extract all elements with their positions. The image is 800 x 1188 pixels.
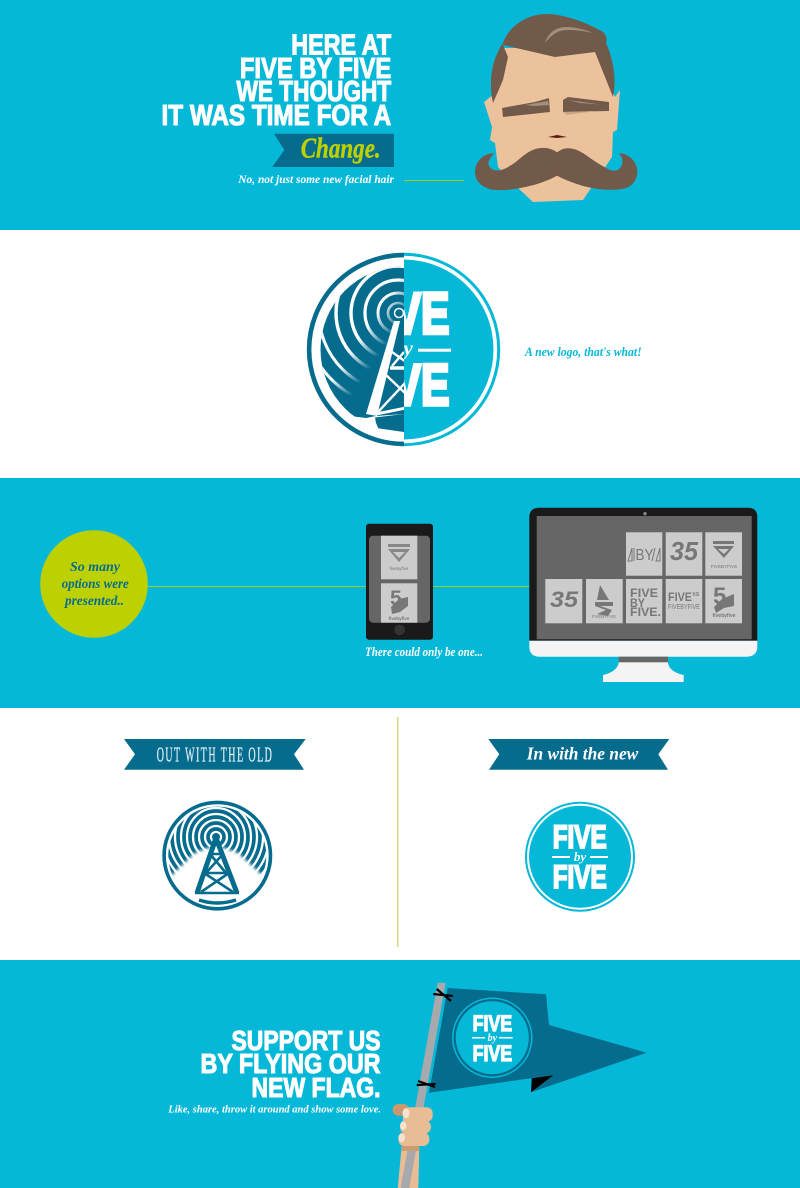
- logo option tiles: FIVEBYFIVE: [668, 604, 700, 611]
- logo option tiles: XS: [692, 592, 700, 598]
- heading: support us: SUPPORT US: [232, 1025, 380, 1056]
- new half of logo: [404, 252, 500, 446]
- new half of logo: by: [393, 336, 414, 360]
- heading: support us: [200, 1025, 381, 1103]
- title: IT WAS TIME FOR A: [162, 100, 391, 132]
- callout: so many options: options were: [62, 577, 129, 592]
- new half of logo: FIVE: [354, 353, 450, 418]
- logo option tiles: FIVE.: [630, 607, 661, 619]
- icon: phone: fivebyfive: [390, 566, 409, 571]
- old half of logo: [306, 252, 404, 446]
- section background: old and new: [0, 708, 800, 960]
- icon: flag held in hand: FIVE: [473, 1041, 512, 1066]
- divider between old and new: [397, 717, 398, 947]
- callout: so many options: presented..: [64, 594, 124, 609]
- connector line through devices: [148, 586, 530, 587]
- title: [162, 30, 392, 132]
- logo option tiles: FIVEBYFIVE: [592, 614, 616, 619]
- section background: options: [0, 478, 800, 708]
- ribbon: change: Change.: [301, 132, 381, 164]
- logo option tiles: FIVEBYFIVE: [711, 564, 737, 569]
- icon: phone: fivebyfive: [389, 616, 410, 621]
- new logo: [526, 803, 634, 911]
- title: FIVE BY FIVE: [240, 53, 391, 85]
- caption: new logo: A new logo, that's what!: [524, 344, 642, 359]
- new logo: by: [574, 849, 586, 864]
- icon: flag held in hand: by: [488, 1033, 498, 1044]
- logo option tiles: [545, 532, 742, 623]
- logo option tiles: BY: [630, 598, 645, 610]
- old logo: [162, 800, 272, 911]
- subtitle: like share: Like, share, throw it around and show some love.: [167, 1104, 381, 1116]
- heading: support us: NEW FLAG.: [252, 1072, 380, 1103]
- ribbon: out with the old: [124, 739, 306, 770]
- icon: moustached face: [476, 14, 637, 202]
- new logo: FIVE: [553, 859, 607, 895]
- logo option tiles: BY: [636, 547, 654, 564]
- ribbon: in with the new: In with the new: [526, 744, 639, 764]
- logo option tiles: fivebyfive: [712, 613, 736, 619]
- logo option tiles: 35: [550, 587, 579, 612]
- section background: header: [0, 0, 800, 230]
- icon: flag held in hand: FIVE: [473, 1011, 512, 1036]
- heading: support us: BY FLYING OUR: [200, 1048, 381, 1079]
- connector line to face: [404, 180, 464, 181]
- icon: phone: [366, 524, 433, 640]
- new half of logo: FIVE: [354, 282, 450, 346]
- title: WE THOUGHT: [236, 76, 392, 108]
- ribbon: out with the old: OUT WITH THE OLD: [157, 742, 273, 766]
- logo option tiles: 35: [670, 536, 699, 566]
- callout: so many options: So many: [70, 560, 121, 575]
- ribbon: in with the new: [488, 739, 669, 770]
- icon: phone: 5: [390, 587, 402, 610]
- icon: desktop monitor: [529, 508, 757, 682]
- ribbon: change: [272, 132, 394, 167]
- icon: flag held in hand: [393, 983, 647, 1188]
- new logo: FIVE: [553, 819, 607, 855]
- subtitle: facial hair: No, not just some new facial hair: [237, 172, 394, 186]
- logo option tiles: FIVE: [630, 588, 658, 600]
- caption: only one: There could only be one...: [365, 645, 483, 659]
- new logo half and half: [306, 252, 500, 446]
- section background: flag: [0, 960, 800, 1188]
- section background: new logo: [0, 230, 800, 478]
- logo option tiles: 5: [713, 583, 726, 610]
- logo option tiles: FIVE: [668, 590, 692, 604]
- callout: so many options: [40, 530, 148, 638]
- title: HERE AT: [291, 30, 392, 62]
